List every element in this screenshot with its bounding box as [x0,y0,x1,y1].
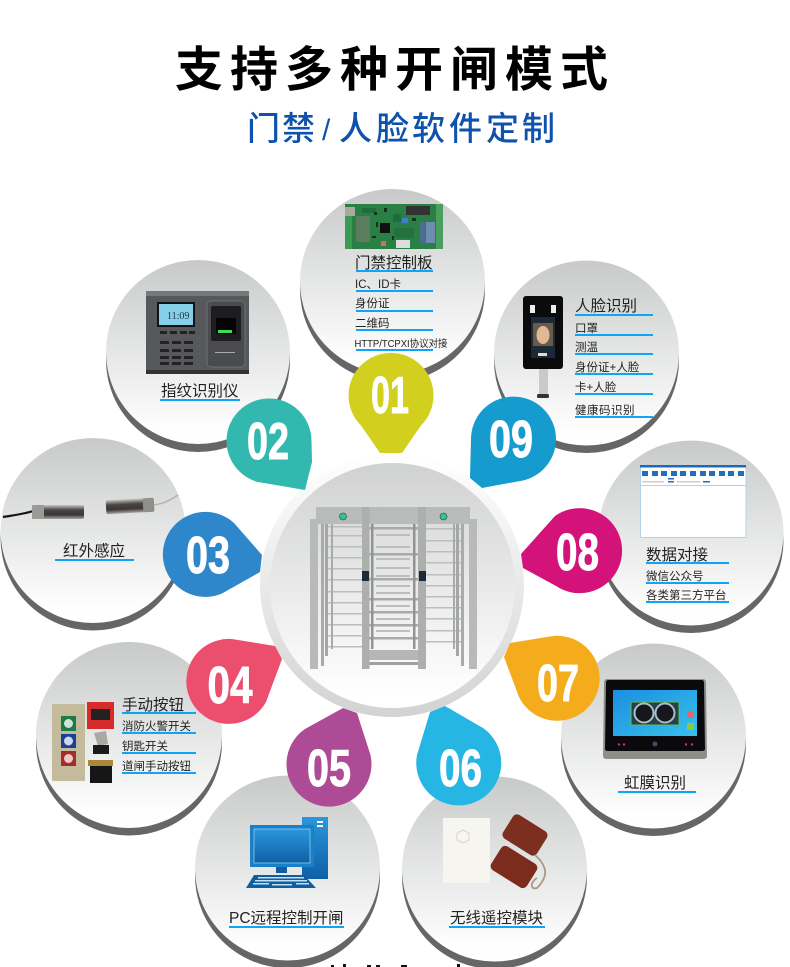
pin 05: 05 [307,740,351,798]
image: software window [640,465,746,538]
pin 06: 06 [439,740,482,798]
subtitle: 软 [412,110,445,147]
panel: 02 fingerprint [106,260,290,452]
subtitle: 人 [339,110,372,147]
image: wireless module and remotes [443,813,549,890]
image: fingerprint reader [146,291,249,374]
image: control board [345,204,443,249]
image: iris terminal [603,679,707,759]
label: 门禁控制板 [355,254,433,272]
pin 06 [416,706,501,805]
panel: 01 access control board: 二维码 [355,317,390,330]
panel: 09 face recognition: 卡+人脸 [575,380,617,394]
panel: 09 face recognition: 身份证+人脸 [575,360,640,374]
subtitle: 脸 [376,110,409,147]
label: 虹膜识别 [624,774,686,792]
panel: 08 data integration: 各类第三方平台 [646,588,726,602]
panel: 01 access control board: HTTP/TCPXI协议对接 [354,337,448,350]
pin 07: 07 [537,655,579,713]
panel: 09 face recognition: 健康码识别 [575,403,635,417]
inner disc [270,463,515,708]
image: computer [246,817,328,888]
panel: 04 manual button: 消防火警开关 [122,719,191,733]
panel: 09 face recognition: 测温 [575,340,598,354]
image: infrared sensors [3,495,178,519]
subtitle: 禁 [282,110,315,147]
label: 手动按钮 [122,696,184,714]
title: 支持多种开闸模式 [175,44,615,97]
panel: 04 manual button: 钥匙开关 [122,739,168,753]
subtitle: 制 [522,110,555,147]
image: fingerprint reader: 11:09 [167,311,189,322]
subtitle: 件 [449,110,482,147]
pin 02 [227,398,312,490]
pin 04 [186,639,282,724]
pin 09: 09 [489,411,533,469]
panel: 01 access control board: IC、ID卡 [355,278,401,291]
panel: 04 manual button [36,642,222,836]
outer ring [260,453,524,717]
image: buttons and switches [52,702,114,783]
label: 指纹识别仪 [161,382,239,400]
panel: 07 iris [561,644,746,836]
pin 04: 04 [208,657,253,715]
image: face terminal [523,296,563,398]
panel: 01 access control board: 身份证 [355,296,390,310]
label: 无线遥控模块 [450,909,543,927]
subtitle: / [322,114,331,147]
panel: 08 data integration: 微信公众号 [646,569,704,583]
panel: 04 manual button: 道闸手动按钮 [122,759,191,773]
label: 数据对接 [646,546,708,564]
cropped next heading at bottom edge [331,964,460,967]
pin 02: 02 [247,413,289,471]
panel: 09 face recognition: 口罩 [575,322,598,335]
label: 红外感应 [63,541,125,560]
subtitle: 定 [486,110,519,147]
pin 08 [521,508,622,593]
label: 人脸识别 [575,297,637,315]
pin 03: 03 [186,527,230,585]
panel: 06 wireless remote [402,776,587,967]
panel: 01 access control board [300,189,485,382]
pin 07 [504,636,600,721]
label: PC远程控制开闸 [229,909,344,927]
pin 05 [286,708,371,807]
panel: 05 PC control [195,776,380,967]
image: full height turnstile [310,507,477,669]
subtitle: 门 [247,110,280,147]
pin 01 [349,353,434,453]
pin 08: 08 [556,524,599,582]
panel: 08 data integration [598,440,784,633]
pin 01: 01 [371,367,409,425]
panel: 03 infrared [0,438,186,630]
pin 03 [163,512,262,597]
pin 09 [470,397,556,488]
panel: central turnstile [260,453,524,717]
panel: 09 face recognition [494,260,679,453]
